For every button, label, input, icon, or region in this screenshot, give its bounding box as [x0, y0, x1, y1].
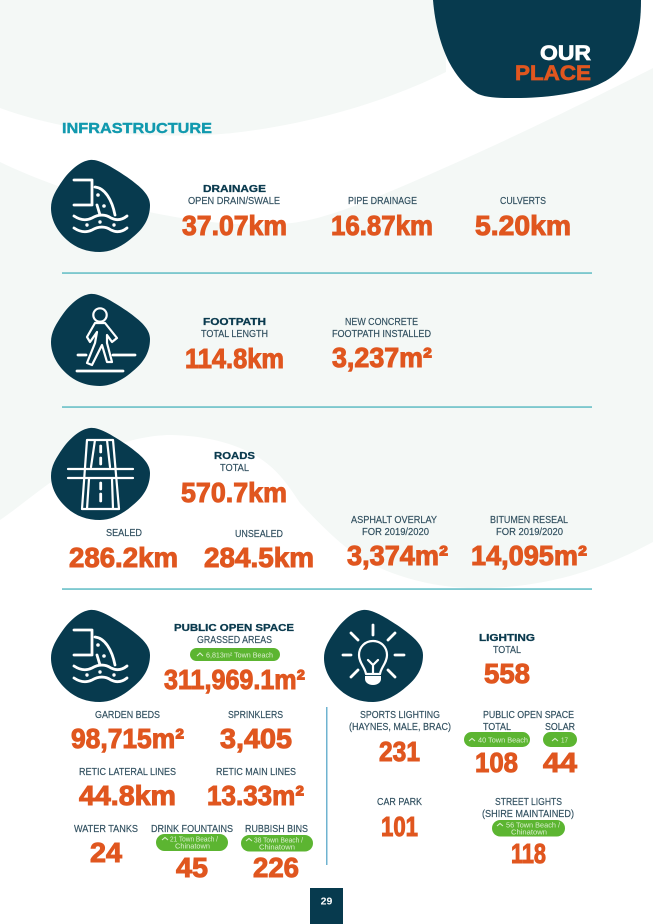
stat: public open space lighting: 108: [475, 747, 518, 778]
icon: irrigation pipe: [51, 610, 150, 702]
stat: public open space lighting: 44: [543, 747, 578, 778]
stat: new concrete footpath: [332, 317, 432, 373]
stat: street lights: 56 Town Beach /: [506, 822, 560, 830]
stat: retic main lines: [207, 767, 304, 811]
stat: unsealed: UNSEALED: [235, 529, 283, 540]
page number: 29: [321, 896, 332, 908]
header blob: our place: [433, 0, 641, 98]
panel: footpath: [51, 294, 432, 386]
stat: water tanks: 24: [90, 837, 123, 868]
stat: total length: [185, 316, 284, 374]
stat: drink fountains: 21 Town Beach /: [170, 836, 218, 844]
stat: street lights: STREET LIGHTS: [495, 797, 562, 808]
stat: sealed: SEALED: [106, 528, 142, 539]
stat: sprinklers: SPRINKLERS: [228, 710, 283, 721]
stat: bitumen reseal: BITUMEN RESEAL: [490, 515, 569, 526]
stat: street lights: (SHIRE MAINTAINED): [482, 809, 574, 820]
stat: water tanks: WATER TANKS: [74, 824, 139, 835]
heading: infrastructure: INFRASTRUCTURE: [62, 120, 212, 137]
stat: open drain: [182, 183, 287, 241]
stat: sports lighting: [349, 710, 451, 767]
stat: sports lighting: SPORTS LIGHTING: [360, 710, 440, 721]
stat: open drain: 37.07km: [182, 210, 287, 241]
stat: drink fountains: [151, 824, 233, 883]
stat: garden beds: [71, 710, 184, 754]
stat: pipe drainage: PIPE DRAINAGE: [348, 196, 417, 207]
stat: public open space lighting: 17: [561, 738, 568, 744]
stat: sealed: 286.2km: [69, 542, 178, 573]
stat: roads total: [181, 450, 287, 508]
stat: public open space lighting: TOTAL: [483, 722, 512, 733]
stat: open drain: DRAINAGE: [203, 183, 266, 195]
stat: sports lighting: 231: [379, 736, 420, 767]
stat: garden beds: 98,715m²: [71, 723, 184, 754]
stat: retic main lines: RETIC MAIN LINES: [216, 767, 296, 778]
icon: highway: [51, 428, 150, 520]
stat: drink fountains: 45: [176, 852, 208, 883]
stat: unsealed: 284.5km: [204, 542, 314, 573]
header blob: our place: PLACE: [515, 62, 591, 85]
stat: car park: CAR PARK: [377, 797, 422, 808]
stat: public open space lighting: [464, 710, 578, 778]
stat: new concrete footpath: FOOTPATH INSTALLED: [332, 329, 431, 340]
stat: asphalt overlay: 3,374m²: [347, 540, 448, 571]
stat: grassed areas: PUBLIC OPEN SPACE: [174, 622, 294, 634]
stat: car park: [377, 797, 422, 842]
stat: rubbish bins: RUBBISH BINS: [245, 824, 308, 835]
stat: street lights: Chinatown: [511, 830, 547, 836]
stat: rubbish bins: 226: [253, 852, 299, 883]
stat: grassed areas: GRASSED AREAS: [197, 635, 272, 646]
panel: lighting: [324, 610, 578, 869]
stat: total length: 114.8km: [185, 343, 284, 374]
stat: roads total: ROADS: [214, 450, 255, 462]
stat: retic main lines: 13.33m²: [207, 780, 304, 811]
stat: asphalt overlay: ASPHALT OVERLAY: [351, 515, 437, 526]
panel: roads: [51, 428, 587, 573]
panel: drainage: [51, 160, 571, 252]
stat: total length: FOOTPATH: [203, 316, 266, 328]
stat: open drain: OPEN DRAIN/SWALE: [188, 196, 281, 207]
stat: garden beds: GARDEN BEDS: [95, 710, 160, 721]
stat: rubbish bins: Chinatown: [259, 844, 295, 852]
icon: light bulb: [324, 610, 423, 702]
stat: roads total: TOTAL: [220, 463, 250, 474]
stat: new concrete footpath: 3,237m²: [332, 342, 432, 373]
stat: unsealed: [204, 529, 314, 573]
stat: pipe drainage: 16.87km: [331, 210, 433, 241]
icon: pedestrian: [51, 294, 150, 386]
stat: pipe drainage: [331, 196, 433, 241]
stat: drink fountains: Chinatown: [175, 844, 210, 850]
stat: culverts: [475, 196, 571, 241]
panel: public open space: [51, 610, 313, 883]
stat: grassed areas: 6,813m² Town Beach: [206, 652, 273, 660]
stat: total length: TOTAL LENGTH: [201, 329, 268, 340]
stat: street lights: 118: [511, 838, 546, 869]
icon: drain pipe: [51, 160, 150, 252]
stat: bitumen reseal: 14,095m²: [471, 540, 587, 571]
stat: grassed areas: 311,969.1m²: [164, 664, 305, 695]
stat: asphalt overlay: FOR 2019/2020: [362, 527, 430, 538]
stat: retic lateral lines: 44.8km: [79, 780, 176, 811]
stat: public open space lighting: PUBLIC OPEN SPACE: [483, 710, 574, 721]
stat: water tanks: [74, 824, 139, 868]
stat: public open space lighting: 40 Town Beach: [478, 738, 528, 744]
stat: car park: 101: [381, 811, 418, 842]
page number: [310, 888, 343, 924]
stat: bitumen reseal: FOR 2019/2020: [496, 527, 564, 538]
stat: rubbish bins: [241, 824, 313, 883]
stat: public open space lighting: SOLAR: [545, 722, 575, 733]
stat: culverts: 5.20km: [475, 210, 571, 241]
stat: sports lighting: (HAYNES, MALE, BRAC): [349, 722, 451, 733]
stat: lighting total: TOTAL: [493, 645, 522, 656]
stat: roads total: 570.7km: [181, 477, 287, 508]
stat: sealed: [69, 528, 178, 573]
stat: lighting total: [479, 632, 535, 689]
stat: sprinklers: 3,405: [220, 723, 292, 754]
stat: culverts: CULVERTS: [500, 196, 546, 207]
stat: new concrete footpath: NEW CONCRETE: [345, 317, 418, 328]
stat: rubbish bins: 38 Town Beach /: [254, 838, 303, 844]
stat: retic lateral lines: RETIC LATERAL LINES: [79, 767, 176, 778]
stat: sprinklers: [220, 710, 292, 754]
stat: drink fountains: DRINK FOUNTAINS: [151, 824, 233, 835]
stat: lighting total: LIGHTING: [479, 632, 535, 644]
stat: bitumen reseal: [471, 515, 587, 571]
header blob: our place: OUR: [540, 42, 591, 65]
stat: asphalt overlay: [347, 515, 448, 571]
stat: lighting total: 558: [484, 658, 530, 689]
stat: grassed areas: [164, 622, 305, 695]
stat: street lights: [482, 797, 574, 869]
stat: retic lateral lines: [79, 767, 176, 811]
